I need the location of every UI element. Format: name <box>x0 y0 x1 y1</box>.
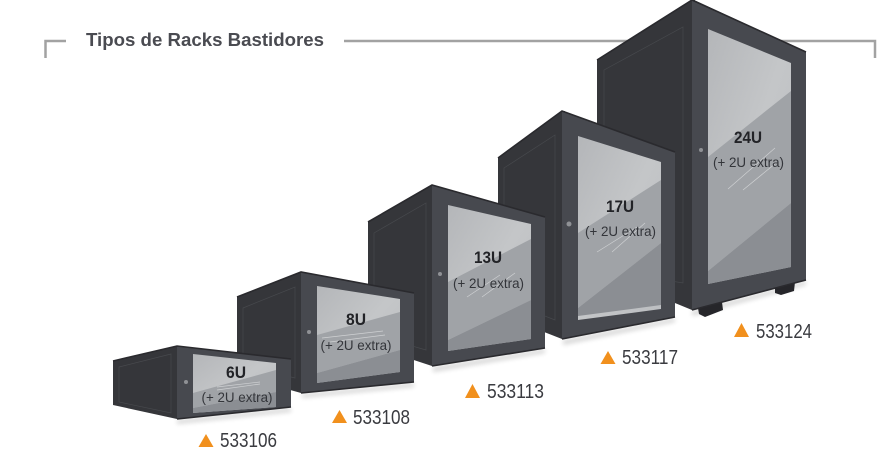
rack 8U <box>237 272 414 398</box>
extra capacity label: (+ 2U extra) <box>202 389 272 405</box>
code 533124: 533124 <box>756 321 812 343</box>
glass door <box>193 354 276 413</box>
title: Tipos de Racks Bastidores <box>86 30 324 50</box>
title frame left bracket <box>46 41 66 58</box>
glass door <box>708 29 791 284</box>
glass door <box>317 286 400 383</box>
reflection streaks <box>322 331 385 342</box>
reflection streaks <box>217 382 260 390</box>
code 533113: 533113 <box>487 381 544 403</box>
rack 24U <box>597 0 806 317</box>
capacity label: 6U <box>226 363 246 382</box>
code 533117: 533117 <box>622 347 678 369</box>
code 533117 <box>600 347 678 369</box>
code 533113 <box>465 381 544 403</box>
code 533106 <box>198 430 277 452</box>
code 533108: 533108 <box>353 407 410 429</box>
rack 13U <box>368 185 545 372</box>
reflection streaks <box>467 273 515 297</box>
code 533108 <box>332 407 410 429</box>
title frame right line <box>344 41 875 58</box>
capacity label: 13U <box>474 248 502 267</box>
glass door <box>578 136 661 320</box>
extra capacity label: (+ 2U extra) <box>320 337 392 353</box>
rack 6U <box>113 346 291 424</box>
extra capacity label: (+ 2U extra) <box>585 223 656 239</box>
reflection streaks <box>728 148 776 190</box>
extra capacity label: (+ 2U extra) <box>713 154 784 170</box>
wheels <box>698 282 795 317</box>
extra capacity label: (+ 2U extra) <box>453 275 524 291</box>
rack 17U <box>498 111 675 345</box>
glass door <box>448 205 531 351</box>
code 533124 <box>734 321 812 343</box>
reflection streaks <box>597 223 645 252</box>
capacity label: 24U <box>734 128 762 147</box>
capacity label: 17U <box>606 197 634 216</box>
capacity label: 8U <box>346 310 366 329</box>
code 533106: 533106 <box>220 430 277 452</box>
